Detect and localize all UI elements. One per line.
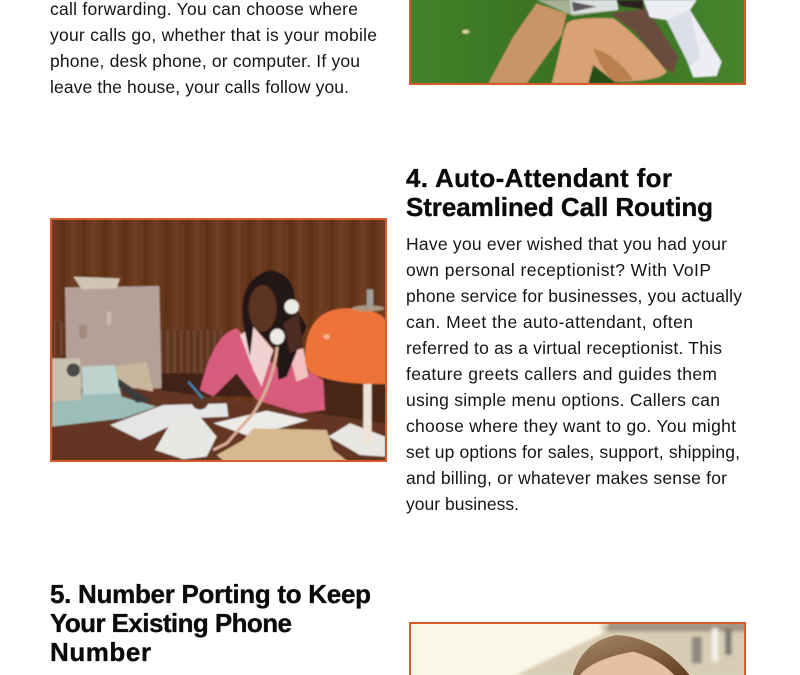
heading: 4. Auto-Attendant — [406, 163, 713, 222]
heading: 4. Auto-Attendant: Streamlined Call Routing — [406, 192, 713, 222]
text block: call forwarding paragraph: leave the house, your calls follow you. — [50, 77, 349, 97]
heading: 5. Number Porting: 5. Number Porting to Keep — [50, 579, 371, 609]
text block: auto-attendant paragraph: can. Meet the auto-attendant, often — [406, 312, 693, 332]
text block: auto-attendant paragraph: your business. — [406, 494, 519, 514]
heading: 4. Auto-Attendant: 4. Auto-Attendant for — [406, 163, 672, 193]
photo: woman with brown hair, cropped at top — [409, 622, 747, 675]
text block: auto-attendant paragraph: Have you ever wished that you had your — [406, 234, 727, 254]
photo: woman on rotary phone at office desk — [47, 215, 390, 465]
photo: woman with laptop sitting on grass — [405, 0, 750, 90]
text block: auto-attendant paragraph: phone service for businesses, you actually — [406, 286, 742, 306]
text block: call forwarding paragraph — [50, 0, 377, 97]
text block: auto-attendant paragraph: choose where they want to go. You might — [406, 416, 736, 436]
text block: auto-attendant paragraph: set up options for sales, support, shipping, — [406, 442, 740, 462]
heading: 5. Number Porting: Number — [50, 637, 151, 667]
text block: auto-attendant paragraph — [406, 234, 742, 514]
heading: 5. Number Porting: Your Existing Phone — [50, 608, 292, 638]
text block: auto-attendant paragraph: own personal receptionist? With VoIP — [406, 260, 711, 280]
text block: auto-attendant paragraph: referred to as a virtual receptionist. This — [406, 338, 722, 358]
heading: 5. Number Porting — [50, 579, 371, 667]
text block: auto-attendant paragraph: using simple menu options. Callers can — [406, 390, 720, 410]
text block: call forwarding paragraph: phone, desk phone, or computer. If you — [50, 51, 360, 71]
text block: call forwarding paragraph: your calls go, whether that is your mobile — [50, 25, 377, 45]
text block: auto-attendant paragraph: and billing, or whatever makes sense for — [406, 468, 727, 488]
text block: auto-attendant paragraph: feature greets callers and guides them — [406, 364, 717, 384]
